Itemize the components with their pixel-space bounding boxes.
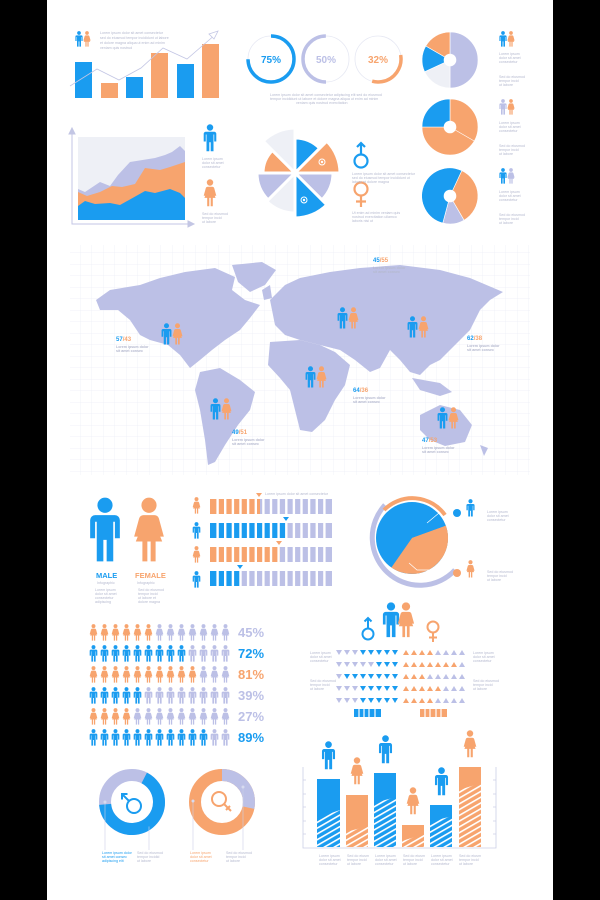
texts: consectetur: [202, 165, 221, 169]
icons and texts: Sed do eiusmod: [499, 75, 525, 79]
map labels: [116, 258, 500, 454]
map labels: Lorem ipsum dolor: [232, 438, 265, 442]
panel: triangle chart: Sed do eiusmod: [310, 679, 336, 683]
panel: bottom donuts: ut labore: [226, 859, 240, 863]
map labels: sit amet consec: [353, 400, 380, 404]
text block: Lorem ipsum dolor sit amet consectetur adipiscing elit sed do eiusmod: [270, 93, 382, 97]
panel: male female figures: FEMALE: [135, 571, 166, 580]
icon: couple: [75, 31, 91, 47]
panel: bottom bar chart: consectetur: [375, 862, 394, 866]
icons and texts: consectetur: [499, 129, 518, 133]
panel: bottom donuts: Lorem ipsum: [190, 851, 211, 855]
text block: [100, 31, 169, 50]
panel: big pie with ring: dolor sit amet: [487, 514, 509, 518]
map labels: sit amet consec: [373, 270, 400, 274]
panel: bottom donuts: adipiscing elit: [102, 859, 124, 863]
icon: male: [204, 124, 216, 151]
icons and texts: [499, 31, 525, 225]
panel: male female figures: dolore magna: [138, 600, 160, 604]
map labels: 49/51: [232, 430, 248, 436]
map labels: 45/55: [373, 258, 389, 264]
panel: big pie with ring: tempor incid: [487, 574, 507, 578]
icon: male symbol: [362, 618, 374, 640]
panel: bottom bar chart: Lorem ipsum: [375, 854, 396, 858]
panel: male female figures: tempor incid: [138, 592, 158, 596]
panel: triangle chart: consectetur: [310, 659, 329, 663]
panel: triangle chart: consectetur: [473, 659, 492, 663]
panel: male female figures: consectetur: [95, 596, 114, 600]
panel: bottom donuts: tempor incid: [226, 855, 246, 859]
icons and texts: Sed do eiusmod: [499, 144, 525, 148]
panel: bottom bar chart: consectetur: [431, 862, 450, 866]
map labels: sit amet consec: [422, 450, 449, 454]
panel: exploded pie: Lorem ipsum dolor sit amet consectetur: [352, 172, 416, 176]
map labels: sit amet consec: [116, 349, 143, 353]
panel: male female figures: Infographic: [137, 581, 155, 585]
panel: triangle chart: ut labore: [473, 687, 487, 691]
text block: veniam quis nostrud exercitation: [296, 101, 348, 105]
legend icons: [453, 509, 461, 517]
panel: people percentage rows: [90, 624, 264, 746]
panel: progress circles: 75%: [261, 55, 281, 66]
texts: Sed do eiusmod: [202, 212, 228, 216]
triangles: [336, 650, 465, 703]
panel: progress circles: 32%: [368, 55, 388, 66]
panel: bottom bar chart: Lorem ipsum: [319, 854, 340, 858]
panel: bottom bar chart: tempor incid: [459, 858, 479, 862]
map labels: Lorem ipsum dolor: [422, 446, 455, 450]
panel: bottom donuts: ut labore: [137, 859, 151, 863]
text block: Lorem ipsum dolor sit amet consectetur: [100, 31, 164, 35]
panel: bottom bar chart: Lorem ipsum: [431, 854, 452, 858]
icons and texts: dolor sit amet: [499, 194, 521, 198]
axes: [69, 128, 194, 227]
map continents: [96, 262, 503, 465]
panel: big pie with ring: Sed do eiusmod: [487, 570, 513, 574]
panel: area chart: [69, 124, 228, 227]
texts: [202, 157, 228, 224]
panel: triangle chart: dolor sit amet: [473, 655, 495, 659]
panel: big pie with ring: consectetur: [487, 518, 506, 522]
panel: triangle chart: Lorem ipsum: [310, 651, 331, 655]
panel: big pie with ring: ut labore: [487, 578, 501, 582]
panel: triangle chart: Sed do eiusmod: [473, 679, 499, 683]
panel: male female figures: [90, 498, 166, 604]
panel: bar rows: Lorem ipsum dolor sit amet consectetur: [265, 492, 329, 496]
panel: bottom bar chart: Sed do eiusm: [347, 854, 369, 858]
percent labels: 39%: [238, 688, 264, 703]
icons and texts: tempor incid: [499, 148, 519, 152]
panel: male female figures: dolor sit amet: [95, 592, 117, 596]
icons and texts: dolor sit amet: [499, 56, 521, 60]
map labels: sit amet consec: [232, 442, 259, 446]
panel: bottom donuts: Lorem ipsum dolor: [102, 851, 133, 855]
panel: bottom donuts: tempor incidid: [137, 855, 159, 859]
panel: male female figures: Lorem ipsum: [95, 588, 116, 592]
icons above bars: [322, 730, 476, 814]
map labels: 57/43: [116, 337, 132, 343]
panel: triangle chart: ut labore: [310, 687, 324, 691]
icon: female symbol: [212, 792, 231, 811]
map people icons: [162, 307, 458, 428]
icons and texts: consectetur: [499, 198, 518, 202]
texts: Lorem ipsum: [202, 157, 223, 161]
panel: bottom donuts: consectetur: [190, 859, 209, 863]
map labels: Lorem ipsum dolor: [373, 266, 406, 270]
icons and texts: Lorem ipsum: [499, 190, 520, 194]
panel: bottom donuts: Sed do eiusmod: [226, 851, 252, 855]
panel: bottom bar chart: tempor incid: [347, 858, 367, 862]
panel: bottom donuts: Sed do eiusmod: [137, 851, 163, 855]
donut 3: [422, 168, 478, 224]
map labels: Lorem ipsum dolor: [353, 396, 386, 400]
panel: progress circles: 50%: [316, 55, 336, 66]
panel: male female figures: MALE: [96, 571, 117, 580]
percent labels: 27%: [238, 709, 264, 724]
panel: triangle chart: Lorem ipsum: [473, 651, 494, 655]
panel: top bar chart: [70, 31, 219, 98]
panel: male female figures: Sed do eiusmod: [138, 588, 164, 592]
icon: female: [204, 179, 216, 206]
mini bars: [354, 709, 447, 717]
map labels: 64/36: [353, 388, 369, 394]
icons and texts: ut labore: [499, 152, 513, 156]
arrow: trend line: [70, 31, 218, 86]
map labels: Lorem ipsum dolor: [467, 344, 500, 348]
text block: sed do eiusmod tempor incididunt ut labore: [100, 36, 169, 40]
panel: male female figures: adipiscing: [95, 600, 111, 604]
panel: triangle chart: [310, 602, 499, 717]
icon: female symbol: [354, 182, 368, 207]
donut 1: [422, 32, 478, 88]
panel: male female figures: ut labore et: [138, 596, 156, 600]
panel: bottom bar chart: Sed do eiusm: [459, 854, 481, 858]
icons and texts: ut labore: [499, 221, 513, 225]
map labels: 62/38: [467, 336, 483, 342]
panel: big pie with ring: Lorem ipsum: [487, 510, 508, 514]
panel: right donuts: [422, 31, 525, 225]
panel: exploded pie: sed do eiusmod tempor incididunt ut: [352, 176, 410, 180]
panel: bottom bar chart: Sed do eiusm: [403, 854, 425, 858]
panel: exploded pie: [257, 128, 416, 223]
panel: triangle chart: dolor sit amet: [310, 655, 332, 659]
panel: world map: [70, 245, 530, 475]
icon: male symbol: [122, 794, 141, 813]
text block: veniam quis nostrud: [100, 46, 132, 50]
panel: bar rows: [193, 492, 332, 590]
percent labels: 89%: [238, 730, 264, 745]
percent labels: 81%: [238, 667, 264, 682]
panel: bottom bar chart: [303, 730, 496, 866]
text block: et dolore magna aliqua ut enim ad minim: [100, 41, 165, 45]
percent labels: 45%: [238, 625, 264, 640]
panel: bottom bar chart: dolor sit amet: [431, 858, 453, 862]
panel: bottom bar chart: ut labore: [403, 862, 417, 866]
panel: male female figures: Infographic: [97, 581, 115, 585]
panel: triangle chart: tempor incid: [473, 683, 493, 687]
icons and texts: tempor incid: [499, 217, 519, 221]
icons and texts: tempor incid: [499, 79, 519, 83]
panel: bottom donuts: dolor sit amet: [190, 855, 212, 859]
donut 2: [422, 99, 478, 155]
panel: bottom bar chart: dolor sit amet: [375, 858, 397, 862]
panel: bottom donuts: [102, 773, 252, 863]
icon: male symbol: [354, 143, 368, 168]
text block: [270, 93, 382, 105]
icons and texts: Lorem ipsum: [499, 121, 520, 125]
percent labels: [238, 625, 264, 745]
map labels: Lorem ipsum dolor: [116, 345, 149, 349]
panel: bottom donuts: sit amet consec: [102, 855, 127, 859]
panel: big pie with ring: [372, 498, 513, 585]
map labels: 47/53: [422, 438, 438, 444]
panel: bottom bar chart: dolor sit amet: [319, 858, 341, 862]
panel: triangle chart: tempor incid: [310, 683, 330, 687]
panel: exploded pie: laboris nisi ut: [352, 219, 373, 223]
panel: progress circles: [248, 32, 405, 105]
texts: ut labore: [202, 220, 216, 224]
percent labels: 72%: [238, 646, 264, 661]
panel: exploded pie: nostrud exercitation ullamco: [352, 215, 397, 219]
panel: bottom bar chart: ut labore: [459, 862, 473, 866]
icons and texts: ut labore: [499, 83, 513, 87]
text block: tempor incididunt ut labore et dolore magna aliqua ut enim ad minim: [270, 97, 378, 101]
icon: female symbol: [428, 622, 438, 642]
panel: bottom bar chart: consectetur: [319, 862, 338, 866]
texts: tempor incid: [202, 216, 222, 220]
panel: bottom bar chart: ut labore: [347, 862, 361, 866]
icons and texts: dolor sit amet: [499, 125, 521, 129]
icons and texts: Lorem ipsum: [499, 52, 520, 56]
icons and texts: consectetur: [499, 60, 518, 64]
panel: exploded pie: labore et dolore magna: [352, 180, 389, 184]
panel: bottom bar chart: tempor incid: [403, 858, 423, 862]
texts: dolor sit amet: [202, 161, 224, 165]
panel: exploded pie: Ut enim ad minim veniam quis: [352, 211, 400, 215]
icons and texts: Sed do eiusmod: [499, 213, 525, 217]
map labels: sit amet consec: [467, 348, 494, 352]
